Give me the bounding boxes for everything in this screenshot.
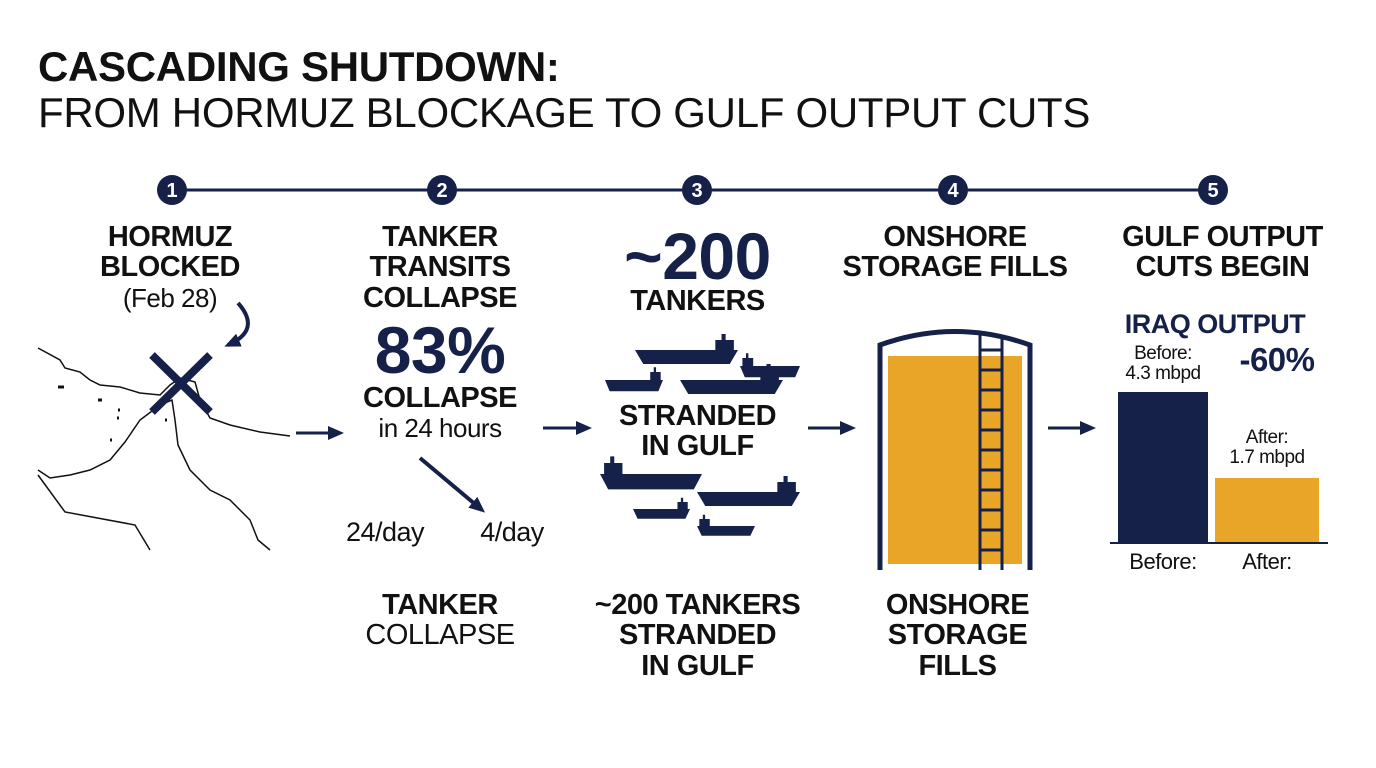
rates: 24/day [346, 517, 424, 547]
step 2 text: COLLAPSE [363, 282, 517, 314]
timeline: 1 [166, 180, 178, 202]
step 1 text: (Feb 28) [123, 283, 217, 313]
step 1 text: HORMUZ [108, 221, 232, 253]
timeline: 4 [947, 180, 959, 202]
text: Before: [1134, 343, 1192, 364]
step 4 text [842, 221, 1067, 283]
timeline: 5 [1207, 180, 1219, 202]
step 2 text [363, 221, 517, 314]
step 4 text: STORAGE FILLS [842, 251, 1067, 283]
timeline [157, 175, 1228, 205]
caption 2: COLLAPSE [365, 619, 515, 651]
text: IN GULF [641, 650, 754, 682]
text: STORAGE [888, 619, 1027, 651]
timeline: 3 [691, 180, 703, 202]
step 1 text [100, 221, 240, 313]
step 5 text: GULF OUTPUT [1122, 221, 1323, 253]
text: -60% [1239, 341, 1315, 378]
text: 4/day [480, 517, 544, 547]
text: FILLS [918, 650, 997, 682]
bar chart [1110, 392, 1328, 543]
text: TANKERS [630, 285, 765, 317]
text: in 24 hours [378, 413, 502, 443]
text: IRAQ OUTPUT [1125, 309, 1305, 339]
curved arrow [228, 303, 248, 345]
step 1 text: BLOCKED [100, 251, 240, 283]
text: STRANDED [619, 400, 776, 432]
text: After: [1242, 549, 1292, 574]
text: After: [1246, 427, 1288, 448]
timeline: 2 [436, 180, 448, 202]
stat 83%: 83% [375, 313, 505, 387]
step 4 text: ONSHORE [883, 221, 1027, 253]
step 2 text: TRANSITS [370, 251, 510, 283]
title [38, 43, 1090, 136]
text: Before: [1129, 549, 1197, 574]
storage tank [880, 332, 1030, 570]
ships [600, 334, 800, 536]
text: COLLAPSE [363, 382, 517, 414]
step 5 text: CUTS BEGIN [1136, 251, 1309, 283]
text: ONSHORE [886, 589, 1029, 621]
text: 4.3 mbpd [1125, 363, 1201, 384]
text: STRANDED [619, 619, 776, 651]
caption 2 [365, 589, 515, 651]
icon: blocked X [152, 355, 210, 412]
title: CASCADING SHUTDOWN: [38, 43, 560, 90]
title: FROM HORMUZ BLOCKAGE TO GULF OUTPUT CUTS [38, 89, 1090, 136]
step 5 text [1122, 221, 1324, 283]
caption 2: TANKER [382, 589, 498, 621]
arrows between steps [296, 428, 1092, 510]
text: IN GULF [641, 430, 754, 462]
text: 1.7 mbpd [1229, 447, 1305, 468]
step 2 text: TANKER [382, 221, 498, 253]
text: ~200 TANKERS [595, 589, 800, 621]
step 3 text: ~200 [624, 219, 771, 293]
map [38, 348, 290, 550]
